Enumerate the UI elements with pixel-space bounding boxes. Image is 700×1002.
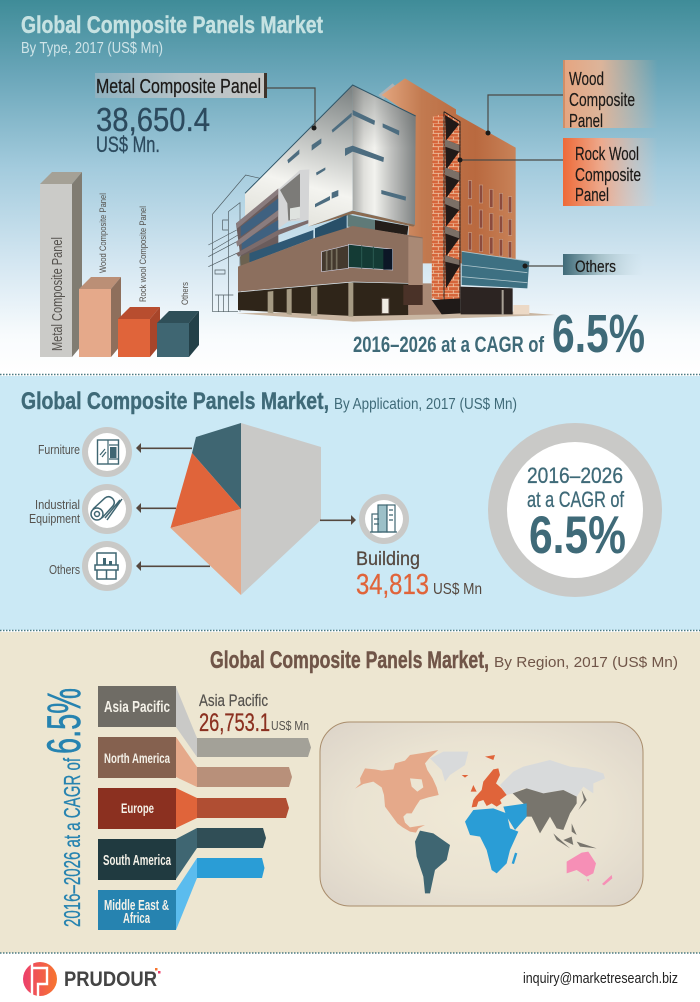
- label: industrial equipment: Industrial: [35, 497, 80, 512]
- map panel: [320, 722, 643, 906]
- arrow: building: [320, 515, 356, 525]
- callout: rock wool composite panel: [563, 138, 658, 206]
- row: north america: [98, 737, 292, 787]
- cagr ring: 2016–2026: [527, 463, 623, 488]
- value: metal composite panel: [96, 102, 210, 157]
- callout: rock wool composite panel: Panel: [575, 185, 609, 205]
- cagr: by region: 2016–2026 at a CAGR of: [59, 758, 85, 927]
- row: south america: South America: [103, 853, 172, 869]
- callout: wood composite panel: [563, 60, 658, 131]
- icon: furniture: [82, 427, 132, 477]
- bar: metal composite panel: Metal Composite Panel: [49, 237, 66, 351]
- row: middle east and africa: [98, 858, 264, 930]
- arrow: industrial equipment: [136, 503, 176, 513]
- value: building: [356, 548, 482, 601]
- subtitle: by type: By Type, 2017 (US$ Mn): [21, 40, 163, 57]
- wood facade: [382, 78, 516, 263]
- map: russia: [500, 760, 605, 797]
- label: furniture: Furniture: [38, 442, 80, 457]
- dot: metal composite panel: [312, 126, 316, 130]
- row: europe: [98, 788, 289, 829]
- panel: by region: [0, 632, 700, 953]
- canopy: [462, 251, 529, 288]
- arrow: others: [136, 561, 210, 571]
- map: asia: [513, 788, 597, 848]
- value: building: Building: [356, 548, 420, 570]
- value: asia pacific: Asia Pacific: [199, 692, 268, 710]
- leader: others: [525, 265, 563, 267]
- label: industrial equipment: Equipment: [29, 511, 80, 526]
- brown block: [238, 226, 423, 292]
- cagr: by region: 6.5%: [37, 688, 90, 754]
- title: by region: By Region, 2017 (US$ Mn): [494, 654, 678, 671]
- bar: rock wool composite panel: Rock wool Composite Panel: [138, 206, 149, 302]
- row: middle east and africa: Africa: [123, 911, 151, 927]
- bar: others: [157, 282, 199, 357]
- row: europe: Europe: [121, 800, 154, 816]
- row: north america: North America: [104, 750, 170, 766]
- value: asia pacific: [199, 692, 309, 737]
- map: north america: [355, 750, 439, 833]
- title: by application: By Application, 2017 (US$ Mn): [334, 396, 517, 413]
- bar: wood composite panel: Wood Composite Panel: [98, 193, 109, 273]
- dot: others: [522, 264, 528, 268]
- wood facade windows: [468, 181, 512, 258]
- bar: wood composite panel: [79, 193, 121, 357]
- callout: rock wool composite panel: Rock Wool: [575, 144, 639, 164]
- callout: wood composite panel: Composite: [569, 89, 635, 110]
- ground floor: [238, 282, 423, 316]
- dot: rock wool composite panel: [458, 158, 462, 162]
- wireframe neighbour: [208, 175, 260, 312]
- callout: wood composite panel: Panel: [569, 110, 603, 131]
- illustration: building: [208, 78, 555, 322]
- label: others: Others: [49, 562, 80, 577]
- cagr: by region: [37, 688, 90, 927]
- logo: PRUDOUR: [64, 968, 157, 991]
- row: south america: [98, 828, 266, 880]
- panel: by application: [0, 376, 700, 630]
- logo: [23, 961, 160, 996]
- map: oceania: [567, 852, 612, 885]
- metal cladding slots: [287, 110, 406, 207]
- brick tower: [432, 113, 445, 300]
- footer: [0, 954, 700, 1002]
- bar: metal composite panel: [40, 172, 82, 357]
- map: africa and middle east: [465, 803, 527, 873]
- callout: metal composite panel: Metal Composite Panel: [96, 76, 261, 98]
- callout: rock wool composite panel: Composite: [575, 165, 641, 185]
- leader: metal composite panel: [267, 88, 315, 128]
- map: greenland: [430, 752, 468, 782]
- cagr: by type: [353, 304, 645, 364]
- row: asia pacific: [98, 686, 311, 757]
- arrow: furniture: [136, 443, 192, 453]
- label: industrial equipment: [29, 497, 80, 526]
- icon: industrial equipment: [82, 484, 132, 534]
- title: by application: Global Composite Panels Market,: [21, 388, 329, 415]
- panel: by type: [0, 0, 700, 373]
- bar chart: by type: [40, 172, 199, 357]
- bar: rock wool composite panel: [118, 206, 160, 357]
- leader: rock wool composite panel: [460, 159, 563, 161]
- cagr: by type: 2016–2026 at a CAGR of: [353, 332, 545, 357]
- title: by type: Global Composite Panels Market: [21, 12, 323, 39]
- value: building: 34,813: [356, 569, 429, 601]
- row: middle east and africa: Middle East &: [104, 898, 169, 914]
- dot: wood composite panel: [486, 130, 490, 136]
- map: europe: [462, 755, 507, 807]
- cagr ring: [488, 423, 662, 597]
- metal cladding: [245, 85, 353, 227]
- callout: wood composite panel: Wood: [569, 68, 604, 89]
- cagr: by type: 6.5%: [552, 304, 645, 364]
- callout: others: Others: [575, 257, 616, 276]
- world map: [355, 750, 612, 893]
- balconies: [445, 115, 459, 288]
- value: metal composite panel: US$ Mn.: [96, 132, 160, 157]
- cagr ring: at a CAGR of: [527, 487, 625, 512]
- map: south america: [415, 831, 450, 893]
- cagr ring: 6.5%: [529, 506, 626, 565]
- left wing windows: [236, 190, 278, 265]
- icon: others: [82, 541, 132, 591]
- value: metal composite panel: 38,650.4: [96, 102, 210, 139]
- band: [249, 230, 313, 263]
- value: asia pacific: 26,753.1: [199, 709, 270, 737]
- value: building: US$ Mn: [433, 581, 482, 598]
- bar: others: Others: [180, 282, 191, 305]
- title: by region: Global Composite Panels Market,: [210, 647, 489, 674]
- icon: building: [359, 494, 409, 544]
- chart: application polygon: [170, 423, 321, 595]
- callout: others: [563, 254, 643, 276]
- value: asia pacific: US$ Mn: [271, 718, 309, 733]
- row: asia pacific: Asia Pacific: [104, 699, 170, 716]
- leader: wood composite panel: [488, 95, 563, 133]
